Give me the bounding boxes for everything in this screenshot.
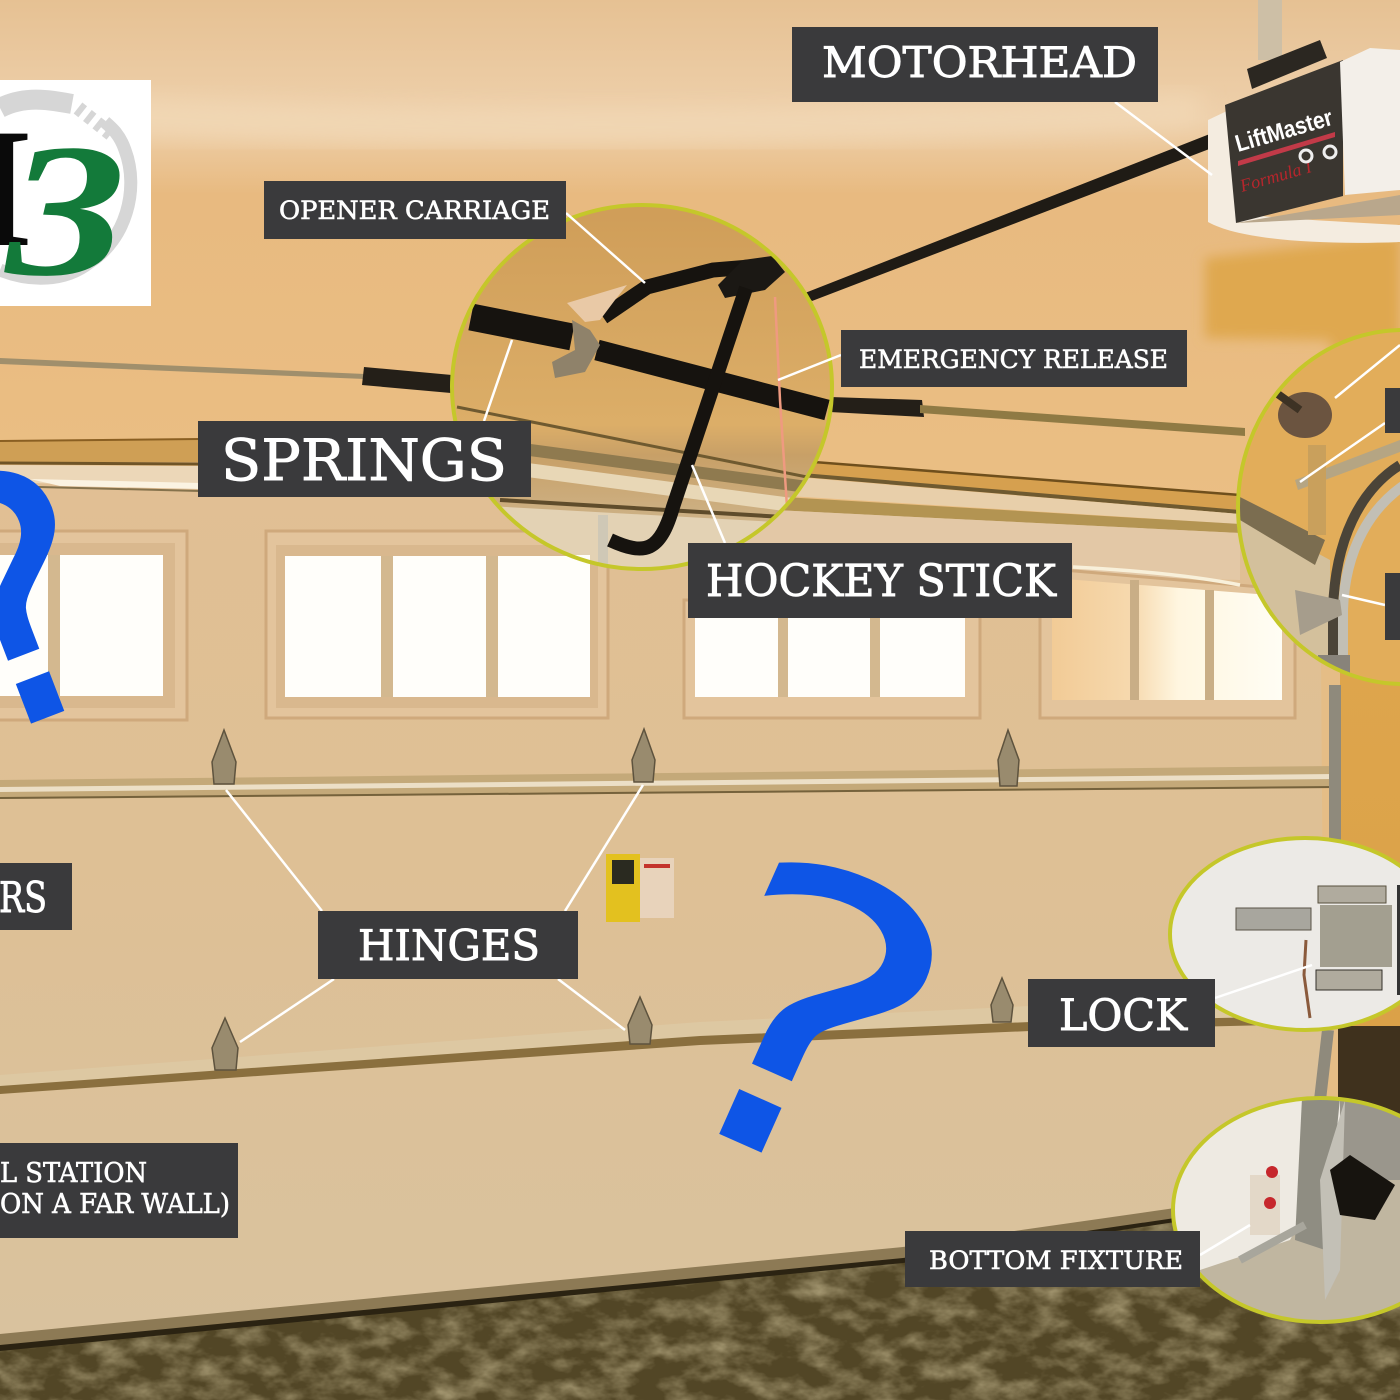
hockey stick bar in inset: [610, 288, 746, 549]
label: hinges: [318, 911, 578, 979]
winding cone in inset: [552, 320, 600, 378]
window 1: [0, 531, 187, 720]
hinge leader lines: [226, 785, 643, 1042]
warning label sticker: [606, 854, 674, 922]
logo: 3: [3, 106, 126, 316]
circle inset: opener carriage and hockey stick: [440, 200, 840, 580]
door bottom shadow line: [0, 1218, 1175, 1351]
spring coil in inset: [471, 317, 572, 337]
label: motorhead: MOTORHEAD: [822, 38, 1137, 87]
circle inset: lock: [1170, 838, 1400, 1030]
motorhead unit: [1208, 0, 1400, 243]
door and window below rails: [502, 506, 767, 567]
carriage arm in inset: [603, 267, 750, 317]
label: opener carriage: OPENER CARRIAGE: [279, 196, 550, 225]
right side wall: [1340, 330, 1400, 1040]
label: emergency release: [841, 330, 1187, 387]
window 4: [1040, 568, 1295, 718]
shadow beneath motorhead: [1205, 235, 1400, 430]
angle iron: [1240, 497, 1325, 565]
label: control station (cropped): L STATION: [0, 1158, 147, 1189]
lock leader line: [1215, 965, 1312, 998]
label: hockey stick: HOCKEY STICK: [706, 556, 1057, 607]
label: lock: LOCK: [1059, 991, 1188, 1041]
label: emergency release: EMERGENCY RELEASE: [859, 345, 1168, 374]
door bottom seal: [0, 1208, 1175, 1348]
floor: [0, 1222, 1400, 1400]
carriage inset leader lines: [484, 213, 841, 543]
label: control station (cropped): ON A FAR WALL): [0, 1189, 230, 1220]
window 4 top edge highlight: [1073, 567, 1240, 585]
pulley: [1278, 392, 1332, 438]
vertical door track: [1320, 685, 1335, 1100]
door top header rails: [0, 439, 1240, 580]
label: rollers (cropped): [0, 863, 72, 930]
label: motorhead: [792, 27, 1158, 102]
opener rail: [805, 128, 1225, 301]
track leader lines: [1300, 345, 1400, 605]
question mark right: ?: [599, 763, 1013, 1284]
label: opener carriage: [264, 181, 566, 239]
label: hinges: HINGES: [358, 921, 540, 970]
motorhead leader line: [1115, 102, 1212, 175]
label: bottom fixture: BOTTOM FIXTURE: [929, 1246, 1183, 1275]
motorhead unit: LiftMaster: [1232, 104, 1336, 158]
label: cropped right upper: [1385, 388, 1400, 433]
garage door panel: [0, 480, 1325, 1335]
door top rails inside inset: [457, 407, 830, 518]
label: hockey stick: [688, 543, 1072, 618]
slotted bracket: [1295, 440, 1400, 490]
window 2: [266, 531, 608, 718]
upper door strut: [0, 766, 1335, 799]
motorhead unit: Formula I: [1237, 156, 1315, 196]
circle inset: track and pulley: [1236, 328, 1400, 690]
right spring shaft: [830, 397, 1245, 436]
label: rollers (cropped): RS: [0, 873, 47, 922]
ceiling background: [0, 0, 1400, 540]
circle inset: bottom fixture: [1170, 1096, 1400, 1330]
left spring shaft: [0, 358, 452, 393]
ceiling ridge highlight: [0, 90, 1200, 144]
lower door strut: [0, 1002, 1310, 1094]
emergency release cord in inset: [775, 297, 787, 507]
bottom fixture leader line: [1200, 1225, 1250, 1255]
label: cropped right lower: [1385, 573, 1400, 640]
door bracket in inset: [598, 515, 608, 564]
vertical bracket: [1308, 445, 1326, 535]
hinges: [212, 729, 1019, 1070]
logo: [0, 80, 151, 316]
label: bottom fixture: [905, 1231, 1200, 1287]
curved door track: [1333, 465, 1400, 690]
label: lock: [1028, 979, 1215, 1047]
track bracket: [1295, 590, 1342, 635]
label: control station (cropped): [0, 1143, 238, 1238]
window 3: [684, 600, 980, 718]
dark opening: [1338, 1026, 1400, 1116]
label: springs: SPRINGS: [221, 428, 507, 494]
